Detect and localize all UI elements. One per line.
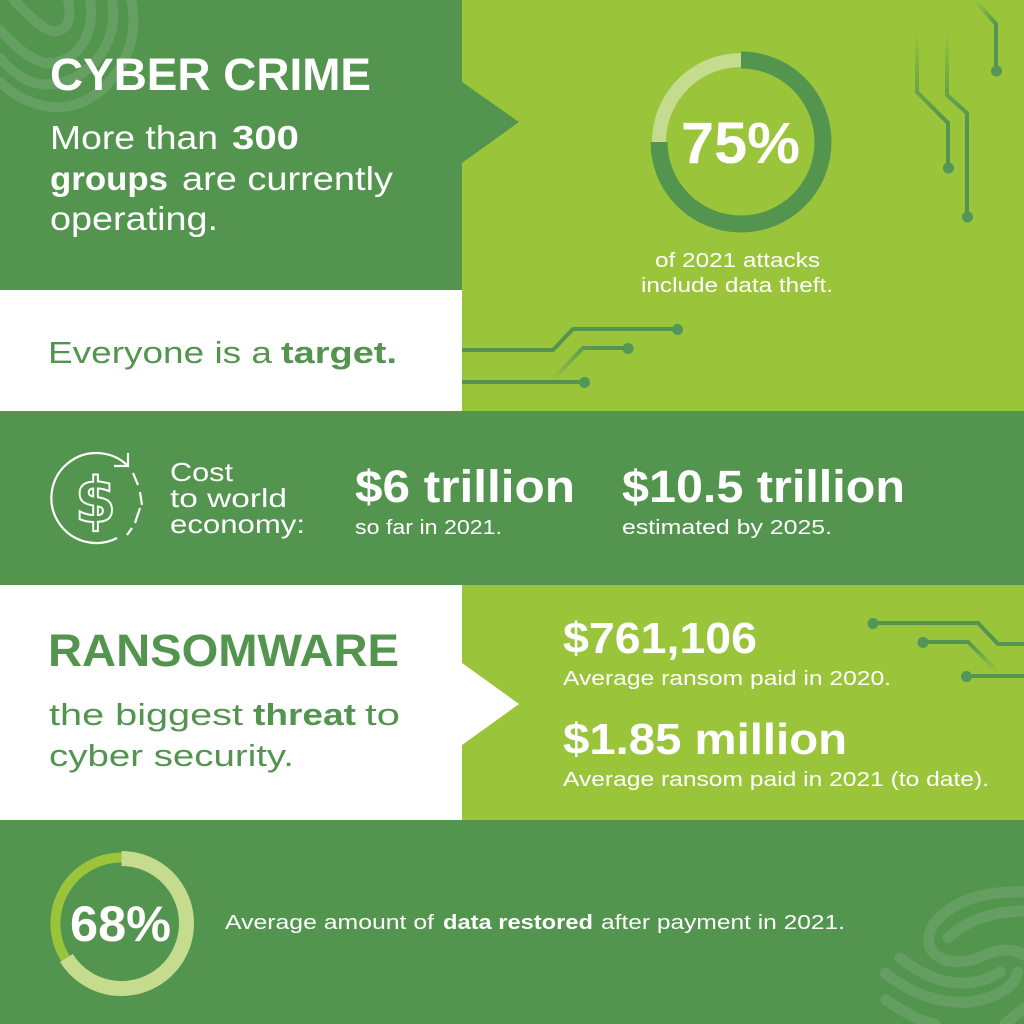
text: groups operating: groups <box>50 160 168 197</box>
text: biggest threat: the biggest <box>49 697 243 732</box>
text: cost to world economy: Cost <box>170 457 234 487</box>
donut chart: 75%: 75% <box>681 111 800 176</box>
icon: dollar cycle <box>51 453 142 543</box>
panel: light green ransom background <box>462 585 1024 820</box>
stat: average ransom 2020 <box>563 614 891 690</box>
stat: 10.5 trillion: $10.5 trillion <box>622 461 905 512</box>
panel: everyone is a target: target. <box>281 335 397 370</box>
text: data restored: data restored <box>443 912 593 934</box>
text: cost to world economy <box>170 457 305 539</box>
text: biggest threat: cyber security. <box>49 738 294 773</box>
stat: 6 trillion: $6 trillion <box>355 461 575 512</box>
text: groups operating: 300 <box>232 119 299 156</box>
text: groups operating: More than <box>50 119 218 156</box>
text: groups operating <box>50 119 394 237</box>
panel: data restored <box>0 820 1024 1024</box>
caption: data theft <box>641 250 833 297</box>
text: groups operating: are currently <box>182 160 394 197</box>
fingerprint decoration top left <box>0 0 133 107</box>
text: groups operating: operating. <box>50 200 218 237</box>
text: biggest threat: to <box>365 697 400 732</box>
caption: data theft: include data theft. <box>641 275 833 297</box>
stat: average ransom 2021: Average ransom paid in 2021 (to date). <box>563 769 989 791</box>
heading: cyber crime: CYBER CRIME <box>50 49 371 100</box>
circuit lines right <box>868 618 1024 682</box>
stat: average ransom 2020: $761,106 <box>563 614 757 663</box>
stat: 10.5 trillion: estimated by 2025. <box>622 517 832 539</box>
stat: 6 trillion <box>355 461 575 539</box>
circuit lines top right <box>917 0 1002 222</box>
text: data restored: after payment in 2021. <box>601 912 845 934</box>
fingerprint decoration bottom right <box>885 892 1024 1024</box>
stat: average ransom 2021 <box>563 715 989 791</box>
panel: ransomware <box>0 585 519 820</box>
text: biggest threat: threat <box>253 697 356 732</box>
caption: data theft: of 2021 attacks <box>655 250 820 272</box>
text: cost to world economy: economy: <box>170 509 305 539</box>
icon: dollar cycle: $ <box>75 464 116 537</box>
text: data restored: Average amount of <box>225 912 435 934</box>
text: data restored <box>225 912 845 934</box>
donut chart: 75% <box>659 60 823 224</box>
donut chart: 68%: 68% <box>70 896 171 952</box>
stat: 6 trillion: so far in 2021. <box>355 517 502 539</box>
stat: average ransom 2020: Average ransom paid in 2020. <box>563 668 891 690</box>
stat: 10.5 trillion <box>622 461 905 539</box>
text: biggest threat <box>49 697 400 773</box>
panel: light green top background <box>462 0 1024 411</box>
heading: ransomware: RANSOMWARE <box>48 625 399 676</box>
panel: everyone is a target: Everyone is a <box>48 335 273 370</box>
donut chart: 68% <box>55 857 186 988</box>
circuit lines middle <box>462 324 683 388</box>
panel: cyber crime <box>0 0 519 290</box>
panel: everyone is a target <box>0 290 462 411</box>
stat: average ransom 2021: $1.85 million <box>563 715 847 764</box>
panel: cost to world economy <box>0 411 1024 585</box>
text: cost to world economy: to world <box>170 483 287 513</box>
